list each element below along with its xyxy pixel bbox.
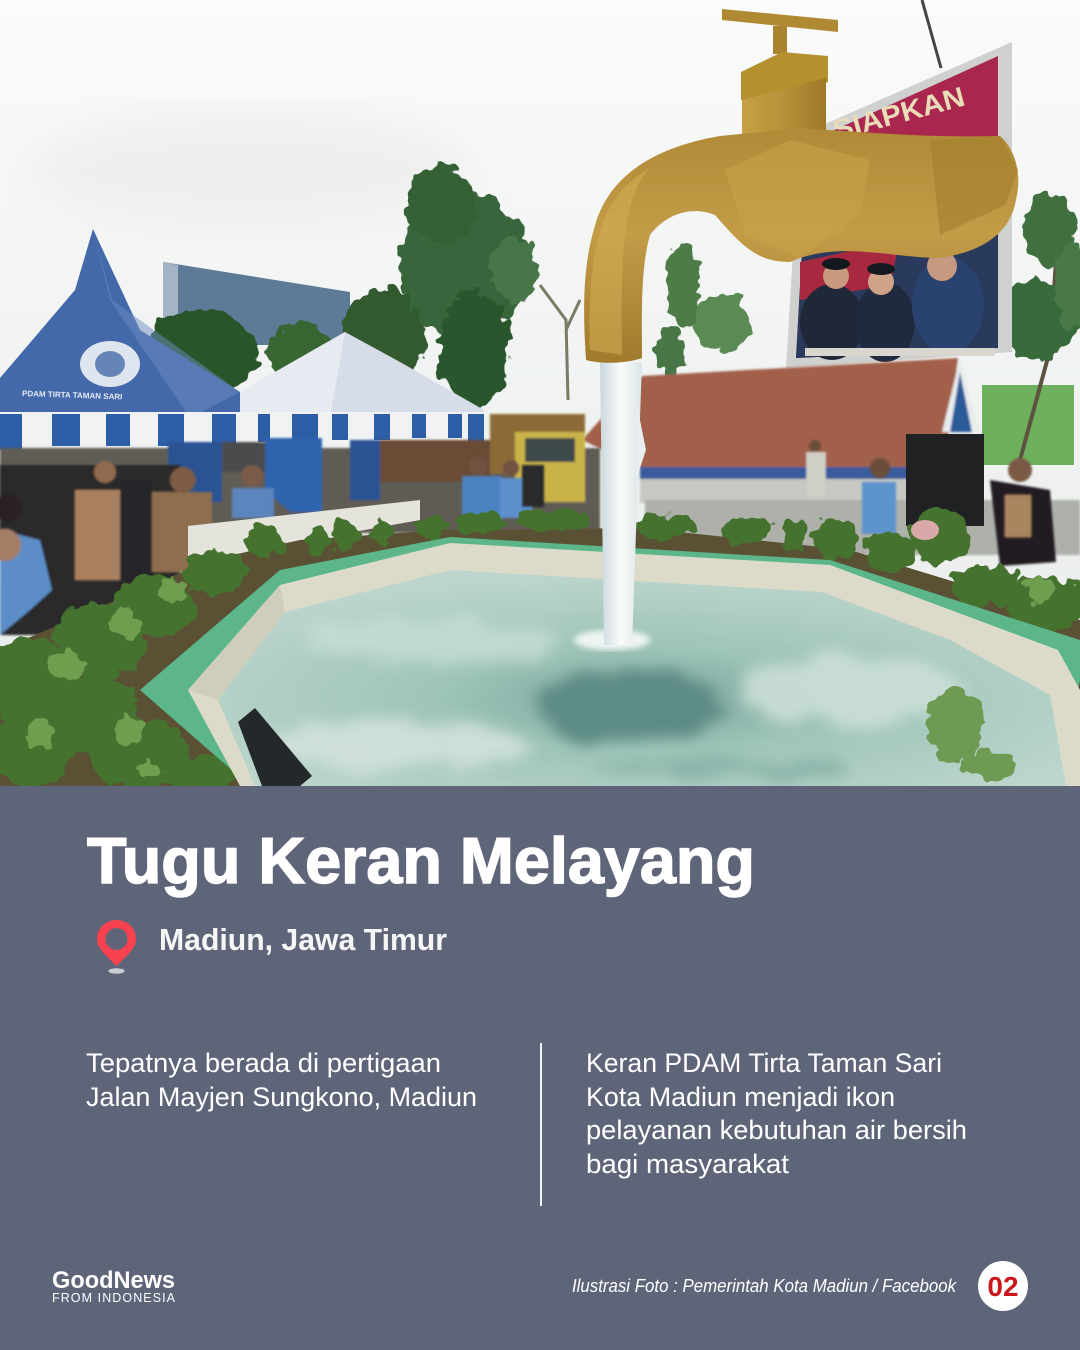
text block: left column: Jalan Mayjen Sungkono, Madiun — [86, 1082, 477, 1112]
location: Madiun, Jawa Timur — [159, 922, 447, 957]
logo: GoodNews from Indonesia: GoodNews — [52, 1267, 175, 1294]
billboard — [786, 0, 1012, 488]
thin tree in middle — [656, 243, 752, 376]
text block: right column — [586, 1048, 967, 1179]
golden faucet — [584, 9, 1018, 363]
text block: left column: Tepatnya berada di pertigaan — [86, 1048, 441, 1078]
bare tree — [540, 285, 580, 400]
speaker box — [906, 434, 984, 526]
photo: floating faucet monument — [0, 0, 1080, 786]
background trees — [142, 167, 539, 408]
front plants and lamp — [238, 687, 1018, 786]
text panel — [0, 786, 1080, 1350]
truck and road — [0, 414, 1080, 555]
pool water — [218, 570, 1066, 786]
sky — [0, 0, 1080, 786]
icon: location pin — [97, 920, 136, 974]
crowd of people — [0, 440, 1056, 635]
text block: right column: pelayanan kebutuhan air bersih — [586, 1115, 967, 1145]
green wall and right tree — [982, 194, 1080, 465]
divider — [540, 1043, 542, 1206]
brick roof building — [582, 358, 980, 503]
tents — [0, 229, 484, 464]
page number badge — [978, 1261, 1028, 1311]
planting beds — [0, 507, 1080, 790]
page number badge: 02 — [987, 1271, 1019, 1302]
title: Tugu Keran Melayang — [87, 824, 755, 897]
text block: right column: Keran PDAM Tirta Taman Sari — [586, 1048, 942, 1078]
tents: PDAM TIRTA TAMAN SARI — [22, 389, 122, 401]
fountain basin border — [140, 537, 1080, 786]
text block: left column — [86, 1048, 477, 1112]
text block: right column: bagi masyarakat — [586, 1149, 789, 1179]
office building — [163, 262, 350, 345]
billboard: SIAPKAN — [830, 81, 968, 146]
low white wall — [188, 500, 420, 562]
falling water column — [600, 362, 646, 645]
text block: right column: Kota Madiun menjadi ikon — [586, 1082, 895, 1112]
logo: GoodNews from Indonesia: FROM INDONESIA — [52, 1291, 176, 1305]
